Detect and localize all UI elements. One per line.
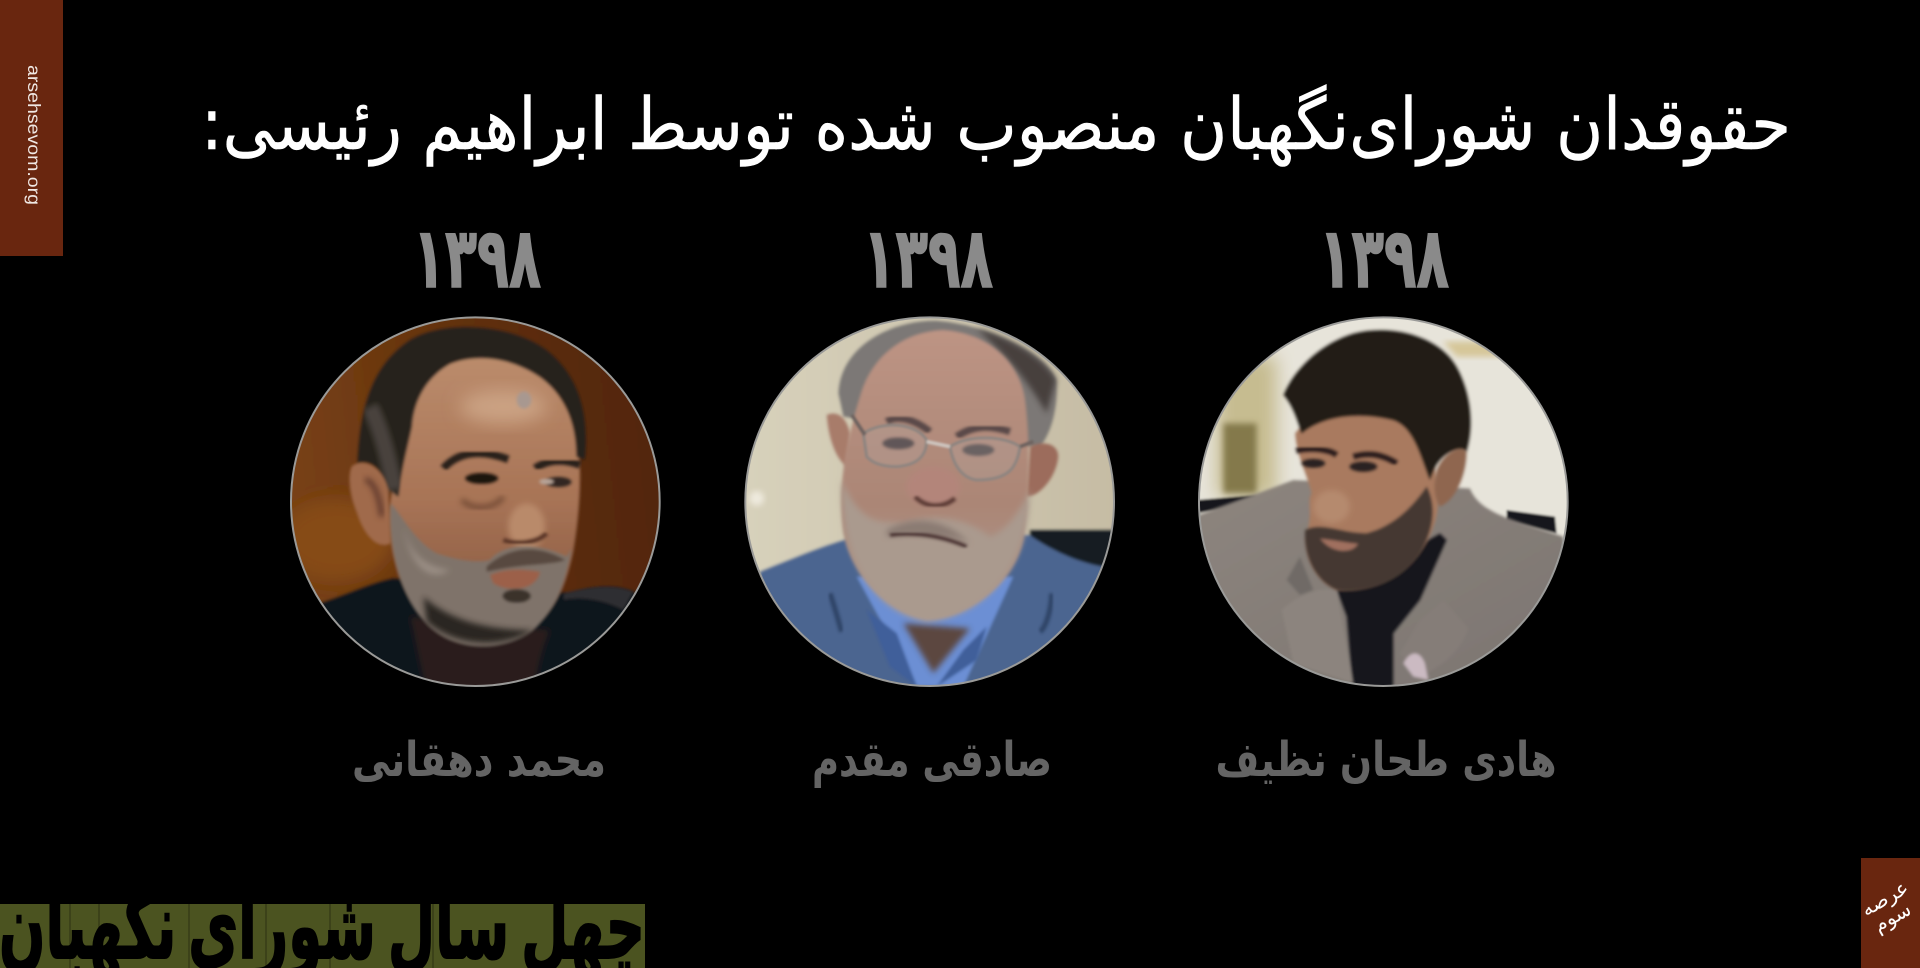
- portrait: Hadi Tahan Nazif: [1198, 316, 1569, 687]
- logo tab: عرصه: [1857, 875, 1913, 921]
- side tab: website: arsehsevom.org: [24, 65, 44, 205]
- year: right: ۱۳۹۸: [1319, 209, 1449, 307]
- name: right: هادی طحان نظیف: [1216, 732, 1556, 788]
- portrait: Sadeghi Moghaddam: [744, 316, 1115, 687]
- year: centre: ۱۳۹۸: [863, 209, 993, 307]
- logo tab: سوم: [1869, 897, 1915, 937]
- name: centre: صادقی مقدم: [812, 732, 1052, 788]
- banner: forty years of the Guardian Council: [0, 904, 645, 968]
- name: left: محمد دهقانی: [352, 732, 606, 788]
- logo tab: [1857, 858, 1920, 968]
- side tab: website: [0, 0, 63, 256]
- year: left: ۱۳۹۸: [413, 209, 541, 307]
- portrait: Mohammad Dehghani: [290, 316, 661, 687]
